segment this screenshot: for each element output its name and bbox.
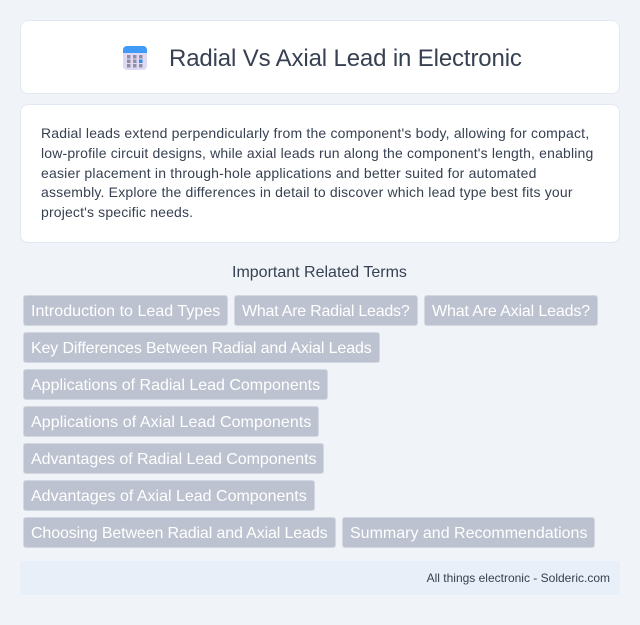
title: Radial Vs Axial Lead in Electronic bbox=[169, 45, 522, 72]
description text: project's specific needs. bbox=[41, 204, 193, 220]
tag bbox=[23, 369, 328, 400]
tag: Applications of Axial Lead Components bbox=[31, 414, 311, 431]
tag bbox=[23, 517, 336, 548]
icon: calendar grid bbox=[123, 46, 147, 70]
tag bbox=[234, 295, 418, 326]
description card bbox=[20, 104, 620, 243]
tag bbox=[23, 332, 380, 363]
tag: Applications of Radial Lead Components bbox=[31, 377, 320, 394]
tag bbox=[342, 517, 595, 548]
related term tags bbox=[23, 295, 598, 548]
tag: Advantages of Radial Lead Components bbox=[31, 451, 317, 468]
tag: Summary and Recommendations bbox=[350, 525, 587, 542]
header card bbox=[20, 20, 620, 94]
tag: Choosing Between Radial and Axial Leads bbox=[31, 525, 327, 542]
tag: What Are Radial Leads? bbox=[242, 303, 410, 320]
description text: assembly. Explore the differences in detail to discover which lead type best fits your bbox=[41, 184, 573, 200]
tag bbox=[23, 480, 315, 511]
description text: easier placement in through-hole applications and better suited for automated bbox=[41, 165, 537, 181]
tag: Advantages of Axial Lead Components bbox=[31, 488, 307, 505]
tag bbox=[23, 295, 228, 326]
tag bbox=[23, 406, 319, 437]
footer text: All things electronic - Solderic.com bbox=[427, 571, 610, 585]
footer bar bbox=[20, 561, 620, 595]
tag: What Are Axial Leads? bbox=[432, 303, 590, 320]
description text: low-profile circuit designs, while axial leads run along the component's length, enabling bbox=[41, 145, 593, 161]
description text: Radial leads extend perpendicularly from the component's body, allowing for compact, bbox=[41, 125, 589, 141]
tag: Introduction to Lead Types bbox=[31, 303, 220, 320]
tag bbox=[23, 443, 324, 474]
description text bbox=[41, 125, 593, 220]
related terms heading: Important Related Terms bbox=[232, 264, 407, 281]
tag bbox=[424, 295, 598, 326]
tag: Key Differences Between Radial and Axial Leads bbox=[31, 340, 372, 357]
